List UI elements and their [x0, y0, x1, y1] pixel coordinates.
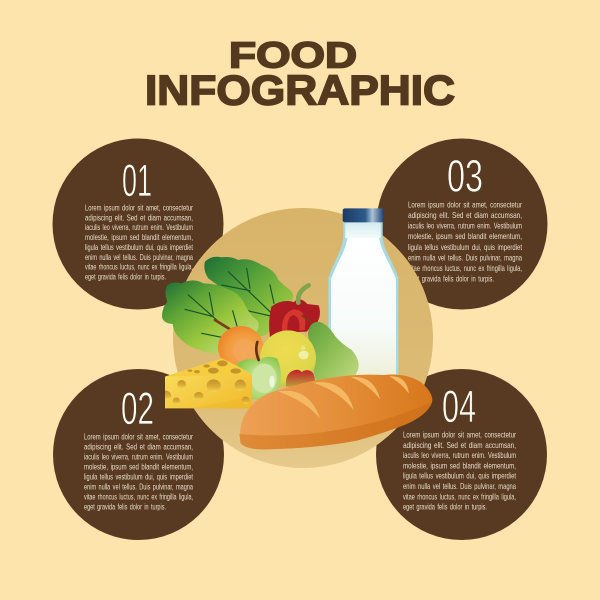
icon: red pepper [269, 285, 320, 337]
text block 04: adipiscing elit. Sed et diam accumsan, [403, 441, 516, 450]
text block 03: vitae rhoncus luctus, nunc ex fringilla ligula, [408, 264, 522, 273]
text block 01: adipiscing elit. Sed et diam accumsan, [85, 213, 193, 222]
number 01: 01 [122, 155, 152, 206]
text block 02: adipiscing elit. Sed et diam accumsan, [84, 442, 193, 452]
text block 04: eget gravida felis dolor in turpis. [403, 502, 487, 512]
text block 01: iaculis leo viverra, rutrum enim. Vestibulum [85, 223, 193, 232]
panel: 03 [376, 138, 548, 310]
text block 03: adipiscing elit. Sed et diam accumsan, [408, 211, 522, 220]
text block 04: iaculis leo viverra, rutrum enim. Vestibulum [403, 451, 516, 460]
text block 02: iaculis leo viverra, rutrum enim. Vestibulum [84, 452, 193, 462]
icon: yellow fruit [260, 330, 316, 386]
text block 02: eget gravida felis dolor in turpis. [84, 502, 166, 512]
panel: 02 [53, 369, 224, 540]
icon: cherry [286, 370, 315, 387]
central circle [173, 208, 433, 468]
number 04: 04 [442, 381, 476, 432]
text block 02: ligula tellus vestibulum dui, quis imperdiet [84, 472, 194, 482]
text block 04 [403, 430, 517, 512]
text block 02: vitae rhoncus luctus, nunc ex fringilla ligula, [84, 492, 193, 502]
text block 03: enim nulla vel tellus. Duis pulvinar, magna [408, 253, 522, 262]
icon: back lettuce leaf [204, 257, 293, 336]
text block 04: Lorem ipsum dolor sit amet, consectetur [403, 430, 516, 440]
panel: 04 [376, 369, 547, 540]
icon: green pear [308, 322, 359, 382]
food illustration [162, 208, 432, 449]
text block 02: enim nulla vel tellus. Duis pulvinar, magna [84, 482, 193, 492]
number 02: 02 [121, 383, 154, 434]
title: FOOD [229, 34, 357, 76]
text block 04: enim nulla vel tellus. Duis pulvinar, magna [403, 482, 516, 491]
text block 03: Lorem ipsum dolor sit amet, consectetur [408, 200, 522, 210]
text block 02: Lorem ipsum dolor sit amet, consectetur [84, 432, 193, 442]
text block 03: ligula tellus vestibulum dui, quis imperdiet [408, 243, 523, 252]
text block 01: molestie, ipsum sed blandit elementum, [85, 233, 193, 242]
text block 01: Lorem ipsum dolor sit amet, consectetur [85, 204, 193, 212]
icon: bread loaf [239, 375, 432, 449]
text block 01: ligula tellus vestibulum dui, quis imperdiet [85, 243, 194, 252]
icon: front lettuce leaf [162, 280, 259, 353]
text block 04: ligula tellus vestibulum dui, quis imperdiet [403, 472, 517, 481]
icon: green apple [237, 342, 281, 399]
text block 01 [85, 204, 194, 282]
text block 03 [408, 200, 523, 284]
panel: 01 [52, 138, 224, 310]
text block 02 [84, 432, 194, 512]
icon: milk bottle [328, 208, 398, 375]
icon: peach [218, 326, 263, 369]
title [145, 34, 455, 114]
text block 04: vitae rhoncus luctus, nunc ex fringilla ligula, [403, 492, 516, 501]
icon: cheese [165, 358, 252, 408]
text block 01: vitae rhoncus luctus, nunc ex fringilla ligula, [85, 263, 193, 272]
text block 04: molestie, ipsum sed blandit elementum, [403, 461, 516, 470]
number 03: 03 [447, 150, 483, 202]
text block 02: molestie, ipsum sed blandit elementum, [84, 462, 193, 472]
text block 01: eget gravida felis dolor in turpis. [85, 272, 166, 282]
text block 03: iaculis leo viverra, rutrum enim. Vestibulum [408, 222, 522, 231]
title: INFOGRAPHIC [145, 66, 455, 114]
text block 01: enim nulla vel tellus. Duis pulvinar, magna [85, 253, 193, 262]
text block 03: molestie, ipsum sed blandit elementum, [408, 232, 522, 241]
text block 03: eget gravida felis dolor in turpis. [408, 274, 494, 284]
